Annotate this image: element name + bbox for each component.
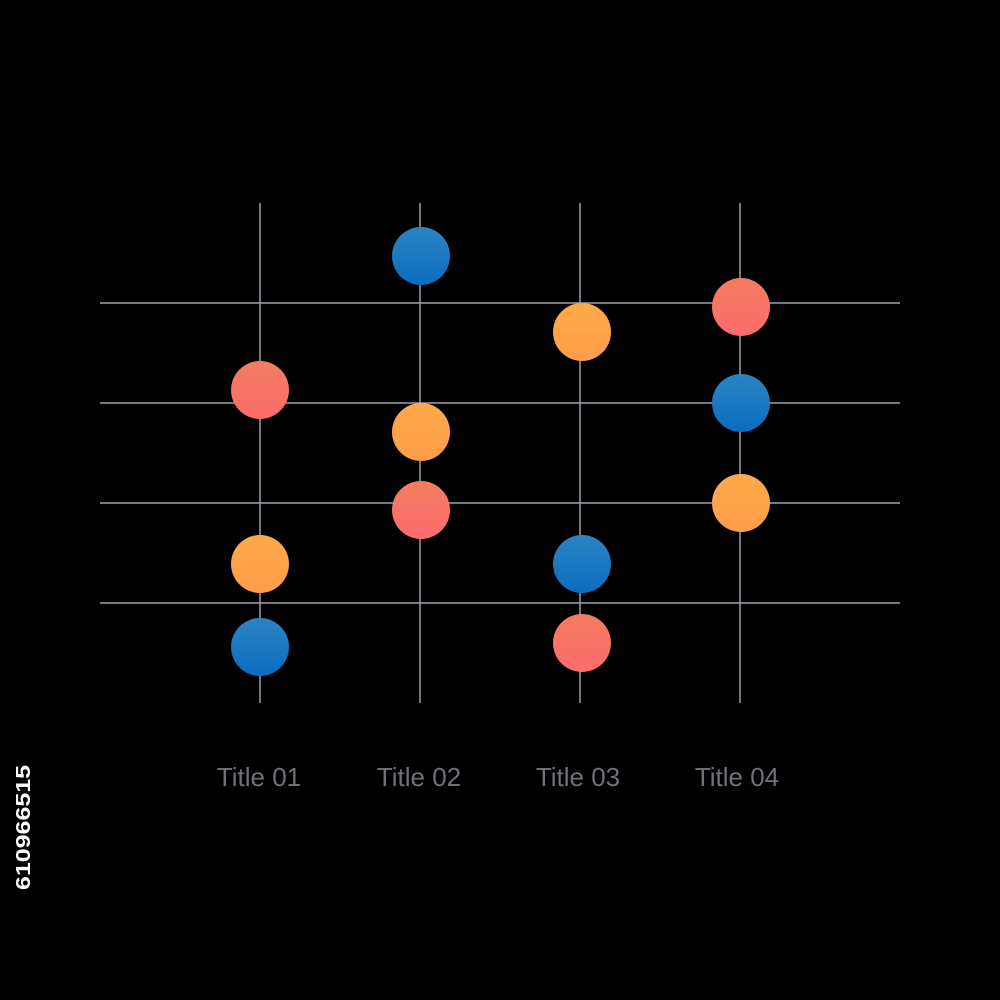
column 4 dots <box>712 278 770 532</box>
column 1 dots <box>231 361 289 676</box>
column labels: Title 02 <box>377 762 461 792</box>
column labels: Title 01 <box>217 762 301 792</box>
column 2 dots <box>392 227 450 539</box>
column labels: Title 04 <box>695 762 779 792</box>
column labels: Title 03 <box>536 762 620 792</box>
side id text: 610966515 <box>13 765 35 890</box>
column 3 dots <box>553 303 611 672</box>
column labels <box>217 762 779 792</box>
